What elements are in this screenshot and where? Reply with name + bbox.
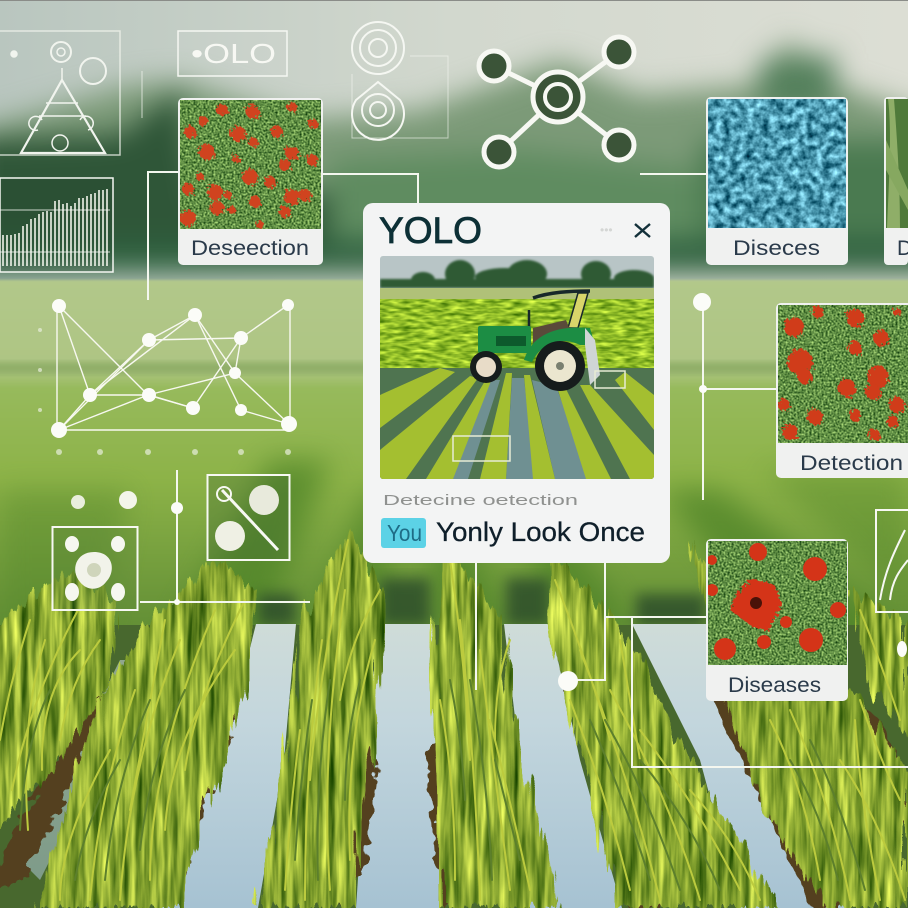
red speckles xyxy=(180,102,318,229)
card: cropped plant at right edge xyxy=(884,97,908,265)
close mark: ••• xyxy=(600,223,613,237)
grass blades: shadow xyxy=(20,680,865,890)
rice rows xyxy=(0,530,908,908)
card: detection right xyxy=(776,303,908,478)
rice strips xyxy=(380,368,654,479)
icon: seed box xyxy=(208,475,290,560)
card: diseases lower right xyxy=(706,539,848,701)
close mark xyxy=(600,223,650,237)
tractor xyxy=(453,291,625,461)
icon: YOLO label box: •OLO xyxy=(191,38,276,69)
icon: concentric rings xyxy=(352,22,448,140)
card: detection top left xyxy=(178,98,323,265)
center panel: YOLO xyxy=(363,203,670,563)
label: Detection xyxy=(800,452,903,475)
card: diseases top right xyxy=(706,97,848,265)
photo: tractor in rice field xyxy=(380,256,654,479)
grass blades: light xyxy=(0,540,905,900)
icon: pyramid panel xyxy=(0,31,142,155)
highlight: You: You xyxy=(387,520,422,546)
red flowers xyxy=(778,306,905,441)
label: Diseces xyxy=(733,237,820,260)
icon: petal box xyxy=(52,491,138,610)
dark heads of the channels xyxy=(258,578,706,626)
dark ground under rows xyxy=(0,625,908,908)
icon: network diagram xyxy=(479,37,634,167)
connector nodes xyxy=(171,293,907,691)
title: YOLO xyxy=(379,210,482,251)
icon: YOLO label box xyxy=(178,31,287,76)
tagline: Yonly Look Once xyxy=(436,517,645,547)
label: Deseection xyxy=(191,237,309,260)
caption: Detecine oetection xyxy=(383,492,578,509)
connector lines xyxy=(140,172,908,767)
line graph xyxy=(38,299,297,455)
red lesions xyxy=(706,543,846,660)
soil banks xyxy=(0,680,908,908)
water strips xyxy=(444,378,590,479)
water channels xyxy=(20,624,850,908)
bar chart panel xyxy=(0,178,113,272)
label: Diseases xyxy=(728,674,821,697)
icon: plant box at right edge xyxy=(876,510,908,612)
blurred far rows xyxy=(0,460,908,690)
